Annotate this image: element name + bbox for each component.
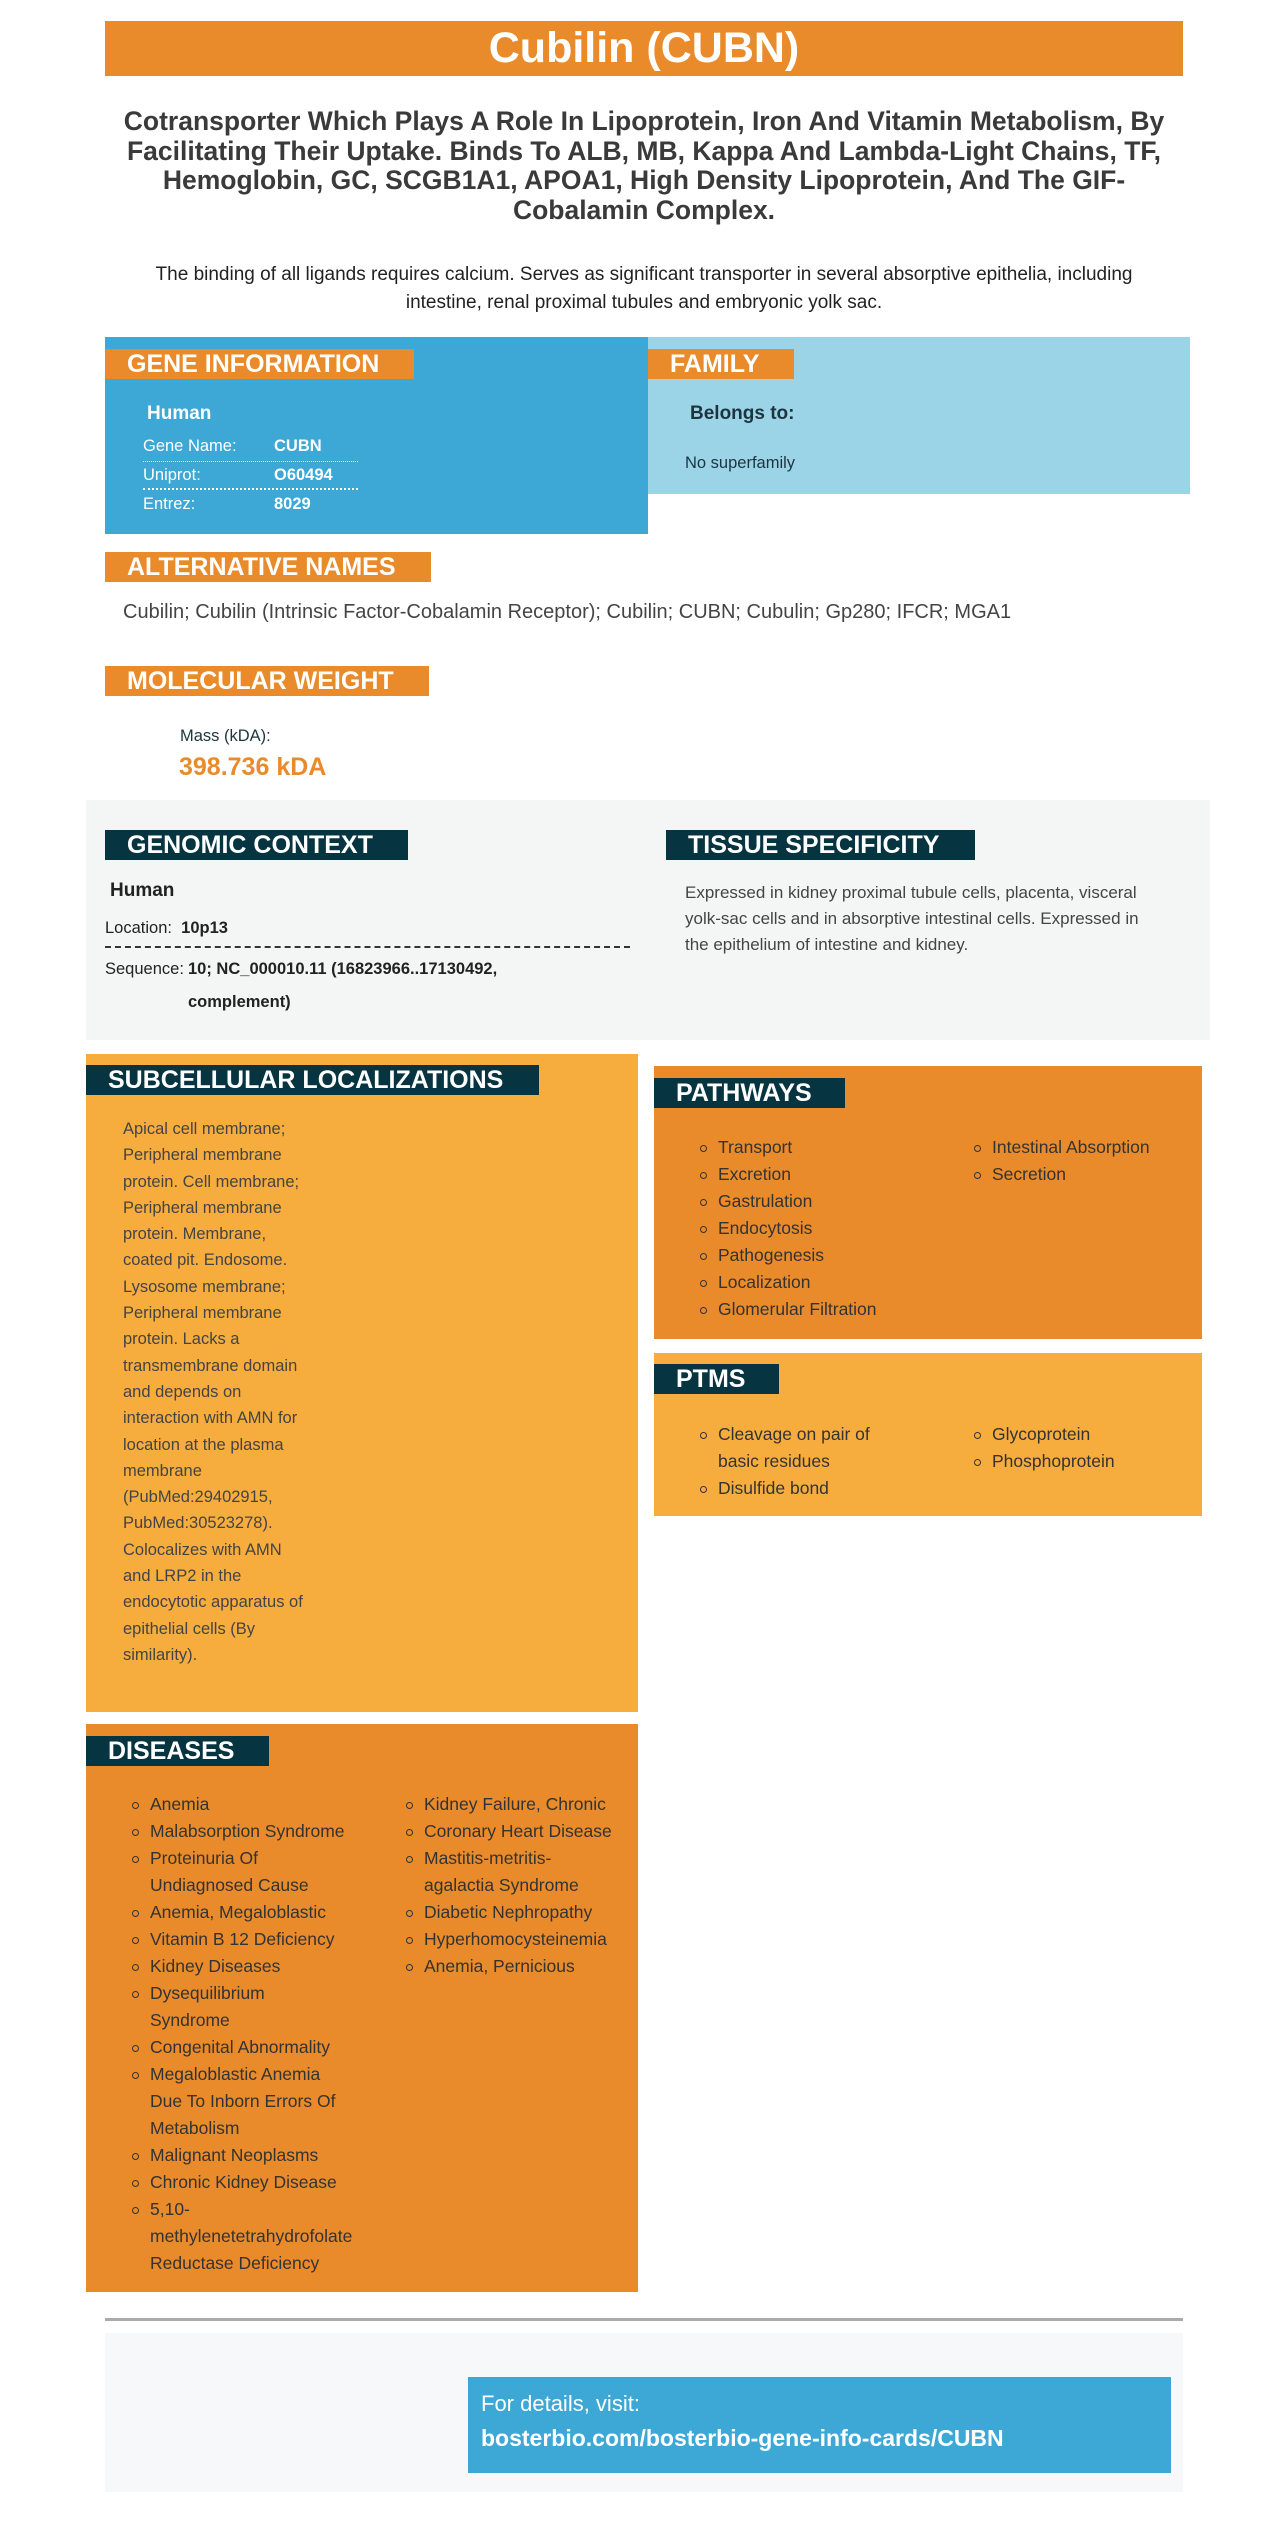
localization text: protein. Cell membrane; — [123, 1173, 299, 1191]
panel: subcellular localizations — [86, 1054, 638, 1712]
panel: ptms — [654, 1353, 1202, 1516]
heading: diseases: DISEASES — [108, 1737, 234, 1765]
localization text: epithelial cells (By — [123, 1620, 255, 1638]
localization text: location at the plasma — [123, 1436, 284, 1454]
diseases col1: Due To Inborn Errors Of — [150, 2091, 335, 2111]
title bar — [105, 21, 1183, 76]
gene table: 8029 — [274, 495, 311, 513]
description: The binding of all ligands requires calcium. Serves as significant transporter in several absorptive epithelia, including intestine, renal proximal tubules and embryonic yolk sac. — [156, 264, 1132, 313]
localization text: Apical cell membrane; — [123, 1120, 285, 1138]
heading: family: FAMILY — [670, 350, 759, 378]
gene table — [143, 437, 358, 513]
sequence: 10; NC_000010.11 (16823966..17130492, complement) — [188, 960, 497, 1011]
localization text: Peripheral membrane — [123, 1146, 282, 1164]
pathways list col1: Transport — [718, 1137, 792, 1157]
footer — [105, 2333, 1183, 2492]
diseases col1: methylenetetrahydrofolate — [150, 2226, 352, 2246]
heading: pathways: PATHWAYS — [676, 1079, 812, 1107]
species: Human — [110, 880, 174, 901]
mass: Mass (kDA): — [180, 727, 271, 745]
diseases col2: Coronary Heart Disease — [424, 1821, 612, 1841]
alternative names text: Cubilin; Cubilin (Intrinsic Factor-Cobalamin Receptor); Cubilin; CUBN; Cubulin; Gp280; IFCR; MGA1 — [123, 601, 1011, 623]
localization text: protein. Membrane, — [123, 1225, 266, 1243]
pathways list col2: Intestinal Absorption — [992, 1137, 1150, 1157]
diseases col2: Diabetic Nephropathy — [424, 1902, 592, 1922]
localization text: protein. Lacks a — [123, 1330, 239, 1348]
panel: pathways — [654, 1066, 1202, 1339]
diseases col2: Anemia, Pernicious — [424, 1956, 575, 1976]
localization text: coated pit. Endosome. — [123, 1251, 287, 1269]
heading: tissue specificity: TISSUE SPECIFICITY — [688, 831, 939, 859]
no superfamily: No superfamily — [685, 454, 795, 472]
gene table: CUBN — [274, 437, 322, 455]
panel: diseases — [86, 1724, 638, 2292]
diseases col2: Kidney Failure, Chronic — [424, 1794, 606, 1814]
diseases col1: Undiagnosed Cause — [150, 1875, 309, 1895]
belongs to: Belongs to: — [690, 403, 794, 424]
title bar: Cubilin (CUBN) — [489, 24, 799, 72]
pathways list col2: Secretion — [992, 1164, 1066, 1184]
localization text: PubMed:30523278). — [123, 1514, 273, 1532]
species: Human — [147, 403, 211, 424]
diseases col1: Megaloblastic Anemia — [150, 2064, 320, 2084]
localization text — [123, 1120, 303, 1664]
localization text: endocytotic apparatus of — [123, 1593, 303, 1611]
heading: gene information: GENE INFORMATION — [127, 350, 379, 378]
ptms col1: Cleavage on pair of — [718, 1424, 870, 1444]
heading: family — [648, 349, 794, 379]
heading: ptms — [654, 1364, 779, 1394]
mass value: 398.736 kDA — [179, 753, 326, 781]
subtitle: Cotransporter Which Plays A Role In Lipoprotein, Iron And Vitamin Metabolism, By Facilitating Their Uptake. Binds To ALB, MB, Kappa And Lambda-Light Chains, TF, Hemoglobin, GC, SCGB1A1, APOA1, High Density Lipoprotein, And The GIF-Cobalamin Complex. — [124, 106, 1164, 224]
panel: gene information — [105, 337, 648, 534]
pathways list col1: Endocytosis — [718, 1218, 812, 1238]
heading: molecular weight: MOLECULAR WEIGHT — [127, 667, 394, 695]
pathways list col1: Pathogenesis — [718, 1245, 824, 1265]
gene table: Uniprot: — [143, 466, 201, 484]
localization text: similarity). — [123, 1646, 197, 1664]
localization text: transmembrane domain — [123, 1357, 297, 1375]
gene table: O60494 — [274, 466, 333, 484]
localization text: Colocalizes with AMN — [123, 1541, 282, 1559]
diseases col1: Malignant Neoplasms — [150, 2145, 318, 2165]
diseases col1: Anemia, Megaloblastic — [150, 1902, 326, 1922]
diseases col1: Malabsorption Syndrome — [150, 1821, 345, 1841]
diseases col1: Chronic Kidney Disease — [150, 2172, 337, 2192]
tissue text: Expressed in kidney proximal tubule cells, placenta, visceral yolk-sac cells and in absorptive intestinal cells. Expressed in the epithelium of intestine and kidney. — [685, 883, 1139, 954]
footer link box — [468, 2377, 1171, 2473]
diseases col1: Proteinuria Of — [150, 1848, 258, 1868]
pathways list col1: Excretion — [718, 1164, 791, 1184]
ptms col1: basic residues — [718, 1451, 830, 1471]
ptms col1 — [700, 1424, 870, 1498]
diseases col1: Congenital Abnormality — [150, 2037, 330, 2057]
pathways list col1: Gastrulation — [718, 1191, 812, 1211]
diseases col1: Dysequilibrium — [150, 1983, 265, 2003]
diseases col2 — [406, 1794, 612, 1976]
diseases col1: Syndrome — [150, 2010, 230, 2030]
localization text: membrane — [123, 1462, 202, 1480]
panel: family — [648, 337, 1190, 494]
localization text: Peripheral membrane — [123, 1199, 282, 1217]
diseases col1: Kidney Diseases — [150, 1956, 280, 1976]
diseases col1: Anemia — [150, 1794, 209, 1814]
pathways list col1 — [700, 1137, 877, 1319]
footer link box: For details, visit: — [481, 2391, 640, 2416]
pathways list col1: Glomerular Filtration — [718, 1299, 877, 1319]
diseases col1: Vitamin B 12 Deficiency — [150, 1929, 334, 1949]
heading: subcellular: SUBCELLULAR LOCALIZATIONS — [108, 1066, 503, 1094]
localization text: Peripheral membrane — [123, 1304, 282, 1322]
diseases col2: Mastitis-metritis- — [424, 1848, 551, 1868]
heading: diseases — [86, 1736, 269, 1766]
localization text: and depends on — [123, 1383, 241, 1401]
ptms col2 — [974, 1424, 1115, 1471]
heading: genomic context: GENOMIC CONTEXT — [127, 831, 373, 859]
location: Location: 10p13 — [105, 919, 228, 937]
localization text: interaction with AMN for — [123, 1409, 297, 1427]
sequence: Sequence: — [105, 960, 184, 978]
diseases col1: 5,10- — [150, 2199, 190, 2219]
diseases col1 — [132, 1794, 352, 2273]
localization text: (PubMed:29402915, — [123, 1488, 273, 1506]
localization text: Lysosome membrane; — [123, 1278, 286, 1296]
footer link box: bosterbio.com/bosterbio-gene-info-cards/CUBN — [481, 2425, 1004, 2451]
ptms col2: Glycoprotein — [992, 1424, 1090, 1444]
panel: genomic context & tissue — [86, 800, 1210, 1040]
localization text: and LRP2 in the — [123, 1567, 241, 1585]
ptms col1: Disulfide bond — [718, 1478, 829, 1498]
heading: ptms: PTMS — [676, 1365, 745, 1393]
gene table: Entrez: — [143, 495, 195, 513]
diseases col1: Reductase Deficiency — [150, 2253, 319, 2273]
diseases col2: agalactia Syndrome — [424, 1875, 579, 1895]
diseases col1: Metabolism — [150, 2118, 239, 2138]
ptms col2: Phosphoprotein — [992, 1451, 1115, 1471]
heading: pathways — [654, 1078, 845, 1108]
gene table: Gene Name: — [143, 437, 237, 455]
heading: alternative names: ALTERNATIVE NAMES — [127, 553, 396, 581]
pathways list col2 — [974, 1137, 1150, 1184]
pathways list col1: Localization — [718, 1272, 810, 1292]
diseases col2: Hyperhomocysteinemia — [424, 1929, 607, 1949]
